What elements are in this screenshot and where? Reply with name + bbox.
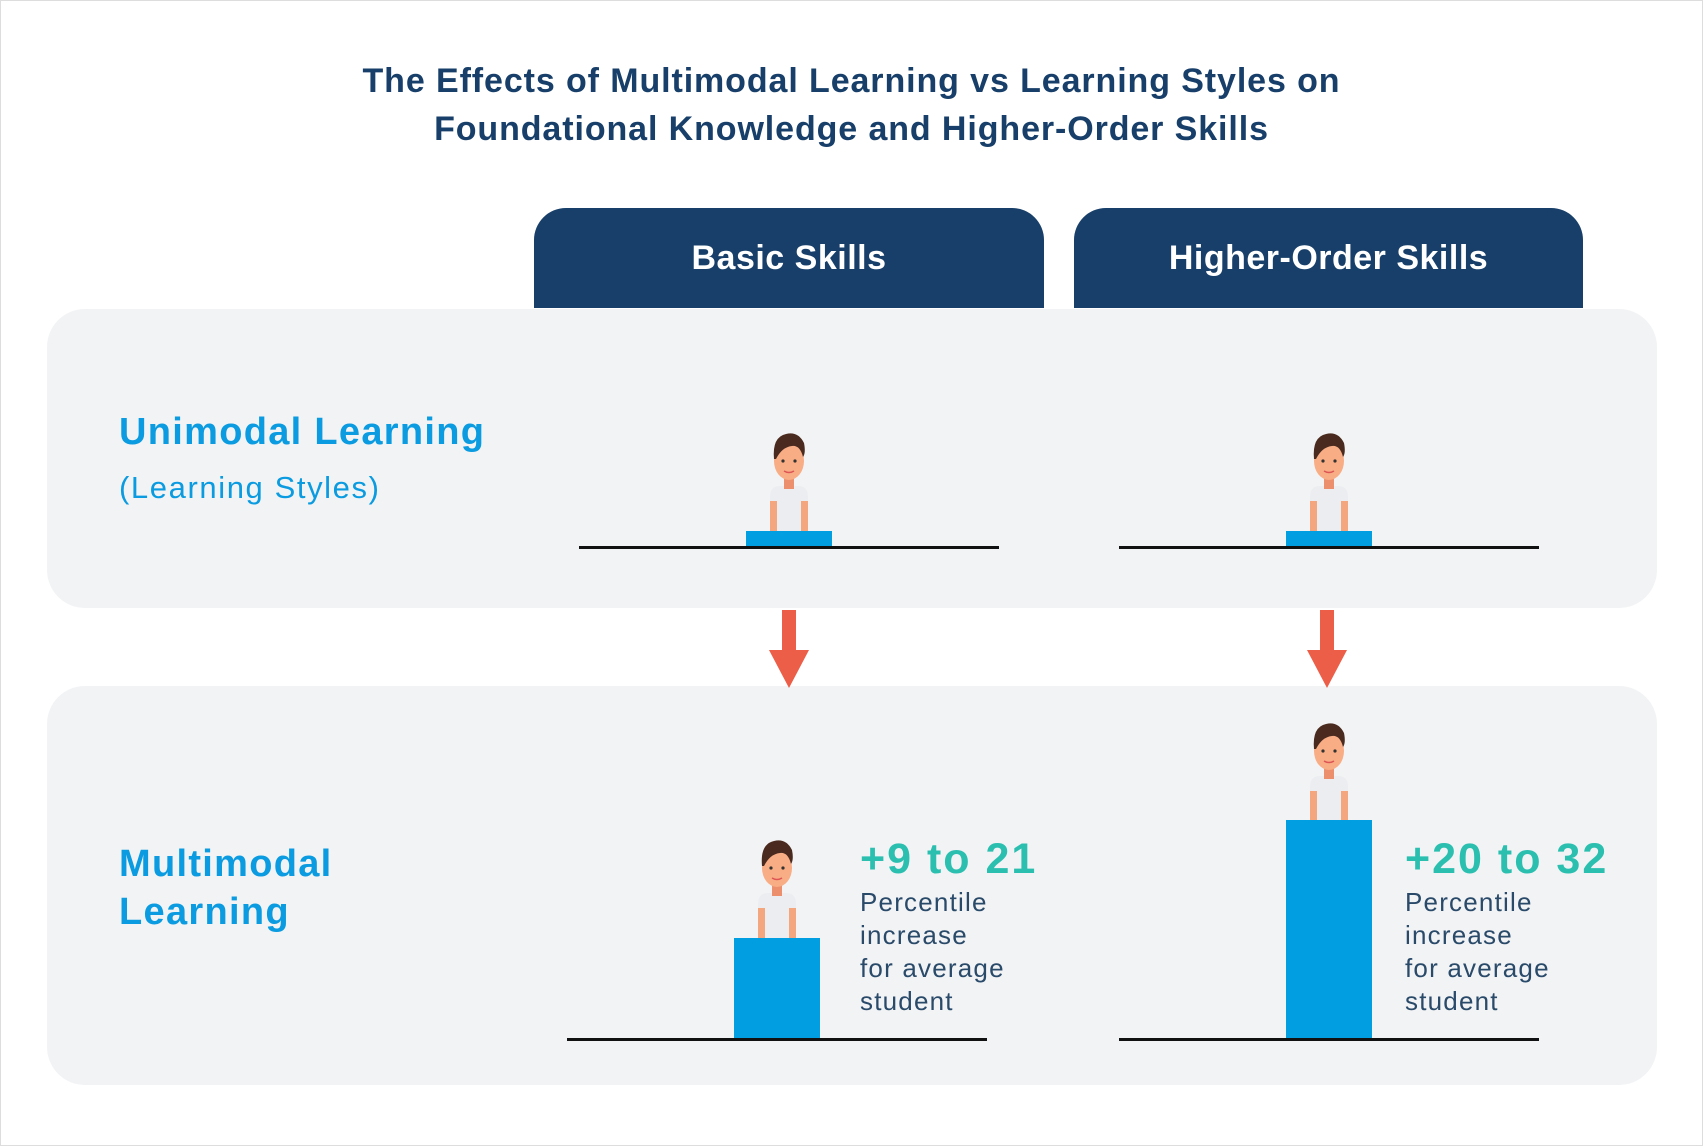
label: unimodal bbox=[119, 411, 485, 505]
chart: multimodal higher bbox=[1119, 723, 1539, 1041]
label: unimodal: Unimodal Learning bbox=[119, 411, 485, 453]
bar bbox=[1286, 531, 1372, 547]
tab: higher-order skills bbox=[1074, 208, 1583, 308]
bar bbox=[734, 938, 820, 1039]
label: multimodal: Multimodal bbox=[119, 843, 333, 885]
person bbox=[770, 433, 808, 531]
stat: higher: student bbox=[1405, 986, 1499, 1016]
tab: higher-order skills: Higher-Order Skills bbox=[1169, 239, 1488, 277]
stat: basic: for average bbox=[860, 953, 1005, 983]
stat: higher: increase bbox=[1405, 920, 1513, 950]
stat: basic: Percentile bbox=[860, 887, 988, 917]
stat: higher bbox=[1405, 835, 1608, 1016]
panel: unimodal bbox=[47, 309, 1657, 608]
person bbox=[758, 840, 796, 938]
title: Foundational Knowledge and Higher-Order Skills bbox=[434, 110, 1269, 148]
stat: higher: for average bbox=[1405, 953, 1550, 983]
stat: basic: increase bbox=[860, 920, 968, 950]
chart: unimodal higher bbox=[1119, 433, 1539, 549]
chart: unimodal basic bbox=[579, 433, 999, 549]
arrow: higher bbox=[1307, 610, 1347, 688]
label: unimodal: (Learning Styles) bbox=[119, 470, 381, 505]
arrow: basic bbox=[769, 610, 809, 688]
stat: basic: student bbox=[860, 986, 954, 1016]
stat: basic: +9 to 21 bbox=[860, 835, 1037, 883]
label: multimodal: Learning bbox=[119, 891, 290, 933]
title: The Effects of Multimodal Learning vs Learning Styles on bbox=[362, 62, 1340, 100]
stat: basic bbox=[860, 835, 1037, 1016]
panel: multimodal bbox=[47, 686, 1657, 1085]
label: multimodal bbox=[119, 843, 333, 933]
tab: basic skills: Basic Skills bbox=[691, 239, 886, 277]
bar bbox=[1286, 820, 1372, 1039]
bar bbox=[746, 531, 832, 547]
person bbox=[1310, 433, 1348, 531]
stat: higher: +20 to 32 bbox=[1405, 835, 1608, 883]
title bbox=[362, 62, 1340, 148]
chart: multimodal basic bbox=[567, 840, 987, 1041]
stat: higher: Percentile bbox=[1405, 887, 1533, 917]
tab: basic skills bbox=[534, 208, 1044, 308]
person bbox=[1310, 723, 1348, 820]
